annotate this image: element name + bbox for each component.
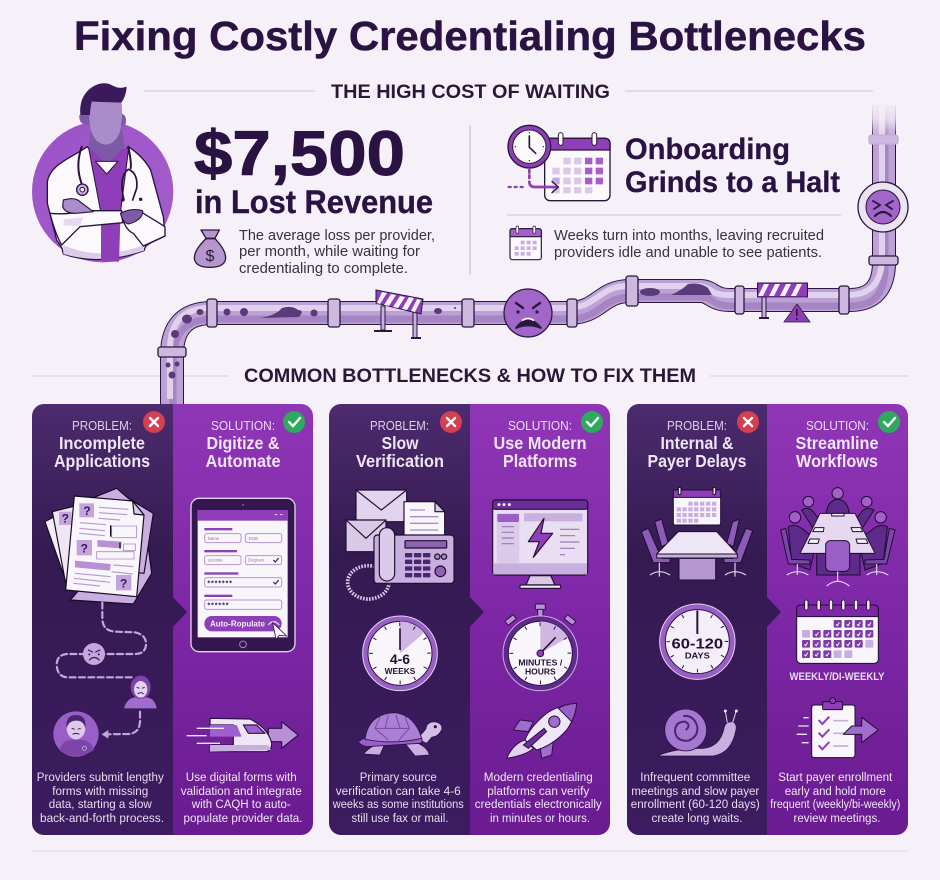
- icon: clock 4-6 weeks: WEEKS: [385, 666, 416, 676]
- doctor illustration: [32, 83, 173, 262]
- text: solution description: Use digital forms with: [186, 770, 297, 784]
- solution header: SOLUTION:: [806, 419, 869, 433]
- problem header: Incomplete: [59, 433, 145, 453]
- text: onboarding description: providers idle and unable to see patients.: [554, 244, 822, 261]
- solution header: SOLUTION:: [508, 419, 572, 433]
- solution header: Digitize &: [206, 433, 280, 453]
- angry face on pipe: [504, 289, 552, 337]
- icon: clock 4-6 weeks: 4-6: [390, 651, 410, 667]
- text: average loss description: per month, while waiting for: [239, 243, 420, 260]
- icon: fast train and arrow: [187, 718, 298, 752]
- text: solution description: with CAQH to auto-: [191, 797, 291, 811]
- problem header: Internal &: [660, 433, 734, 453]
- icon: team meeting around table: [781, 488, 895, 586]
- text: solution description: validation and integrate: [181, 784, 302, 798]
- problem header: [54, 411, 165, 471]
- text: problem description: verification can take 4-6: [336, 784, 461, 798]
- problem header: [356, 411, 462, 471]
- problem header: [648, 411, 759, 471]
- icon: tablet with auto-populate form: *******: [207, 578, 232, 587]
- section heading: common bottlenecks: COMMON BOTTLENECKS & HOW TO FIX THEM: [244, 366, 696, 387]
- text: solution description: in minutes or hours.: [490, 811, 590, 825]
- icon: clock 60-120 days: [660, 604, 735, 679]
- icon: checklist clipboard: [797, 698, 878, 758]
- icon: empty meeting room with calendar: [641, 487, 753, 580]
- icon: stopwatch: MINUTES /: [518, 658, 563, 668]
- pipe clogs: [166, 284, 712, 378]
- icon: weekly calendar: [797, 600, 878, 663]
- icon: stack of forms: ?: [120, 576, 127, 590]
- heading: onboarding grinds to a halt: [625, 133, 840, 199]
- text: solution description: Start payer enrollment: [778, 770, 893, 784]
- text: problem description: meetings and slow payer: [631, 784, 759, 798]
- solution header: [494, 411, 603, 471]
- clogged pipeline: [158, 100, 908, 410]
- text: solution description: platforms can verify: [487, 784, 590, 798]
- label: weekly/bi-weekly: WEEKLY/DI-WEEKLY: [790, 671, 885, 683]
- icon: envelopes and fax machine: [346, 490, 454, 599]
- icon: back-and-forth path with people: [53, 603, 157, 757]
- text: solution description: populate provider data.: [184, 811, 302, 825]
- text: problem description: forms with missing: [52, 784, 148, 798]
- icon: tablet with auto-populate form: Auto-Ropulate: [210, 619, 265, 629]
- text: solution description: Modern credentialing: [484, 770, 593, 784]
- icon: stopwatch: [503, 604, 578, 691]
- panel: internal and payer delays: [627, 404, 908, 835]
- solution header: SOLUTION:: [211, 419, 275, 433]
- solution header: [206, 411, 305, 471]
- icon: tablet with auto-populate form: License: [208, 558, 223, 563]
- solution header: Workflows: [796, 451, 878, 471]
- icon: clock and calendar: [508, 125, 610, 201]
- solution header: Use Modern: [494, 433, 586, 453]
- heading: onboarding grinds to a halt: Onboarding: [625, 133, 790, 166]
- icon: tablet with auto-populate form: [191, 498, 295, 652]
- solution header: Automate: [206, 451, 281, 471]
- problem header: PROBLEM:: [72, 419, 132, 433]
- icon: stack of forms: ?: [83, 504, 91, 518]
- solution header: Streamline: [796, 433, 879, 453]
- icon: tablet with auto-populate form: ******: [207, 601, 229, 610]
- text: problem description: Primary source: [360, 770, 437, 784]
- text: problem description: create long waits.: [652, 811, 742, 825]
- icon: tablet with auto-populate form: DOB: [249, 536, 258, 541]
- text: solution description: review meetings.: [794, 811, 880, 825]
- solution header: [796, 411, 900, 471]
- text: problem description: still use fax or mail.: [352, 811, 448, 825]
- text: solution description: frequent (weekly/bi-weekly): [770, 797, 900, 811]
- icon: clock 4-6 weeks: [363, 616, 437, 691]
- text: solution description: early and hold more: [785, 784, 886, 798]
- text: problem description: weeks as some institutions: [332, 797, 464, 811]
- problem header: Applications: [54, 451, 150, 471]
- text: solution description: credentials electronically: [475, 797, 603, 811]
- icon: small calendar: [510, 226, 541, 260]
- text: onboarding description: Weeks turn into months, leaving recruited: [554, 227, 824, 244]
- icon: tablet with auto-populate form: Name: [208, 536, 220, 541]
- problem header: Slow: [382, 433, 419, 453]
- stat: $7,500 in lost revenue: in Lost Revenue: [195, 184, 433, 220]
- barricade one: [374, 290, 423, 339]
- panel: slow verification: [329, 404, 610, 835]
- icon: clock 60-120 days: DAYS: [685, 651, 710, 661]
- icon: snail: [657, 709, 738, 756]
- heading: onboarding grinds to a halt: Grinds to a Halt: [625, 166, 840, 199]
- pipe flanges: [158, 135, 898, 357]
- icon: stack of forms: ?: [81, 542, 88, 556]
- text: average loss description: credentialing to complete.: [239, 260, 408, 277]
- panel: incomplete applications: [32, 404, 313, 835]
- title: Fixing Costly Credentialing Bottlenecks: [74, 13, 866, 59]
- stat: $7,500 in lost revenue: [194, 119, 433, 220]
- text: average loss description: The average loss per provider,: [239, 227, 435, 244]
- text: problem description: enrollment (60-120 days): [631, 797, 760, 811]
- section heading: the high cost of waiting: THE HIGH COST OF WAITING: [331, 82, 610, 103]
- icon: stack of forms: [45, 488, 153, 604]
- stat: $7,500 in lost revenue: $7,500: [194, 119, 405, 189]
- icon: monitor with lightning bolt: [493, 500, 588, 588]
- icon: money bag: [194, 230, 226, 267]
- text: problem description: Providers submit lengthy: [37, 770, 165, 784]
- problem header: PROBLEM:: [667, 419, 727, 433]
- valve with angry face: [858, 182, 908, 232]
- problem header: Payer Delays: [648, 451, 747, 471]
- icon: stack of forms: ?: [62, 512, 69, 526]
- text: problem description: back-and-forth process.: [40, 811, 164, 825]
- barricade two with warning sign: [758, 283, 810, 322]
- icon: turtle: [358, 713, 442, 756]
- text: problem description: data, starting a slow: [49, 797, 152, 811]
- text: problem description: Infrequent committee: [640, 770, 750, 784]
- icon: tablet with auto-populate form: Degrees: [248, 558, 264, 563]
- icon: stopwatch: HOURS: [525, 667, 556, 677]
- problem header: Verification: [356, 451, 444, 471]
- problem header: PROBLEM:: [370, 419, 429, 433]
- solution header: Platforms: [503, 451, 577, 471]
- icon: clock 60-120 days: 60-120: [671, 635, 723, 652]
- icon: rocket: [507, 703, 577, 758]
- icon: money bag: $: [206, 248, 215, 265]
